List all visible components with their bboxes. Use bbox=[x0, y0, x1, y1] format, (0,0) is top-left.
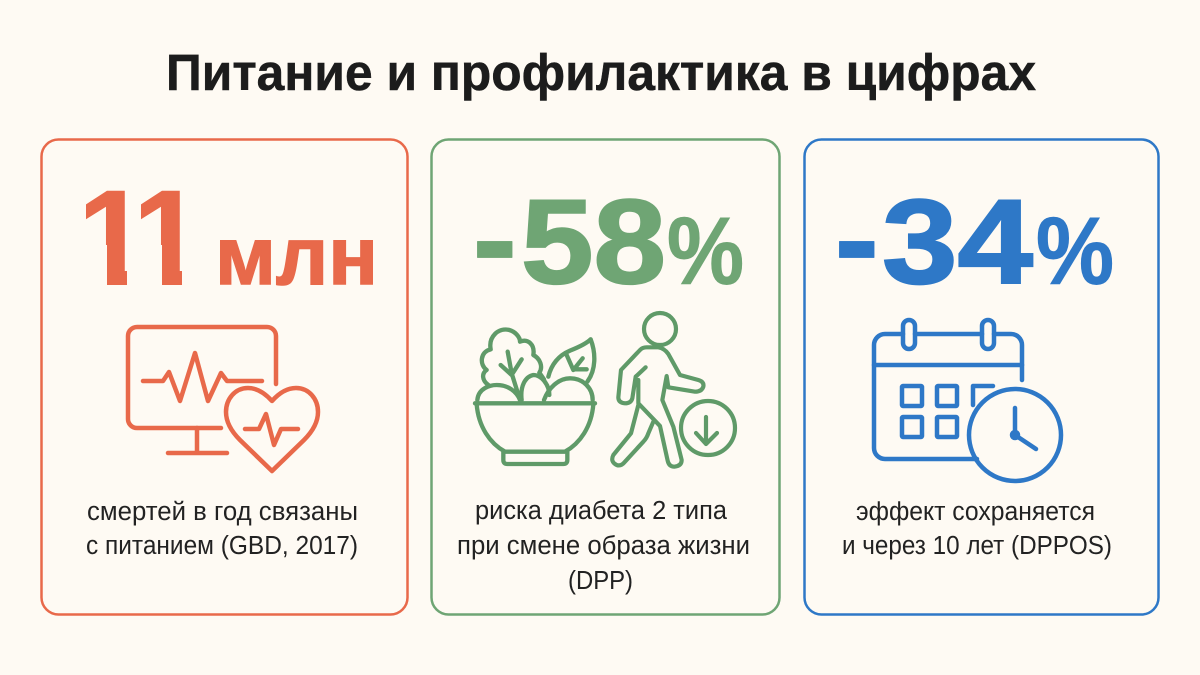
stat: -34%: 34 bbox=[882, 175, 1033, 309]
stat: -34%: % bbox=[1036, 198, 1114, 305]
icon: calendar with clock bbox=[874, 320, 1061, 481]
panel border: long-term effect bbox=[804, 140, 1158, 614]
icon: salad bowl bbox=[475, 330, 595, 464]
description: long-term effect: и через 10 лет (DPPOS) bbox=[842, 532, 1112, 560]
stat: 11 млн: млн bbox=[215, 211, 378, 302]
stat: -58%: 58 bbox=[521, 175, 666, 309]
description: deaths: с питанием (GBD, 2017) bbox=[86, 532, 358, 560]
stat: -34% bbox=[834, 162, 1114, 315]
greens bbox=[477, 330, 594, 400]
description: diabetes: риска диабета 2 типа bbox=[475, 497, 728, 525]
panel border: diabetes bbox=[432, 140, 780, 614]
bowl bbox=[475, 403, 595, 464]
description: deaths: смертей в год связаны bbox=[87, 498, 358, 526]
stat: -58%: % bbox=[667, 198, 744, 305]
icon: monitor and heart bbox=[128, 327, 318, 471]
panel: diabetes bbox=[432, 140, 780, 614]
stat: -58%: - bbox=[472, 162, 518, 315]
panel border: deaths bbox=[42, 140, 408, 614]
description: long-term effect: эффект сохраняется bbox=[856, 498, 1095, 526]
icon: walking person with down arrow bbox=[612, 313, 735, 467]
stat: 11 млн: 11 bbox=[74, 162, 205, 315]
stat: -58% bbox=[472, 162, 744, 315]
panel: long-term effect bbox=[804, 140, 1158, 614]
stat: -34%: - bbox=[834, 162, 880, 315]
stat: 11 млн bbox=[86, 190, 373, 286]
description: diabetes: (DPP) bbox=[568, 567, 633, 595]
panel: deaths bbox=[42, 140, 408, 614]
title: Питание и профилактика в цифрах bbox=[166, 44, 1036, 101]
description: diabetes: при смене образа жизни bbox=[457, 532, 750, 560]
